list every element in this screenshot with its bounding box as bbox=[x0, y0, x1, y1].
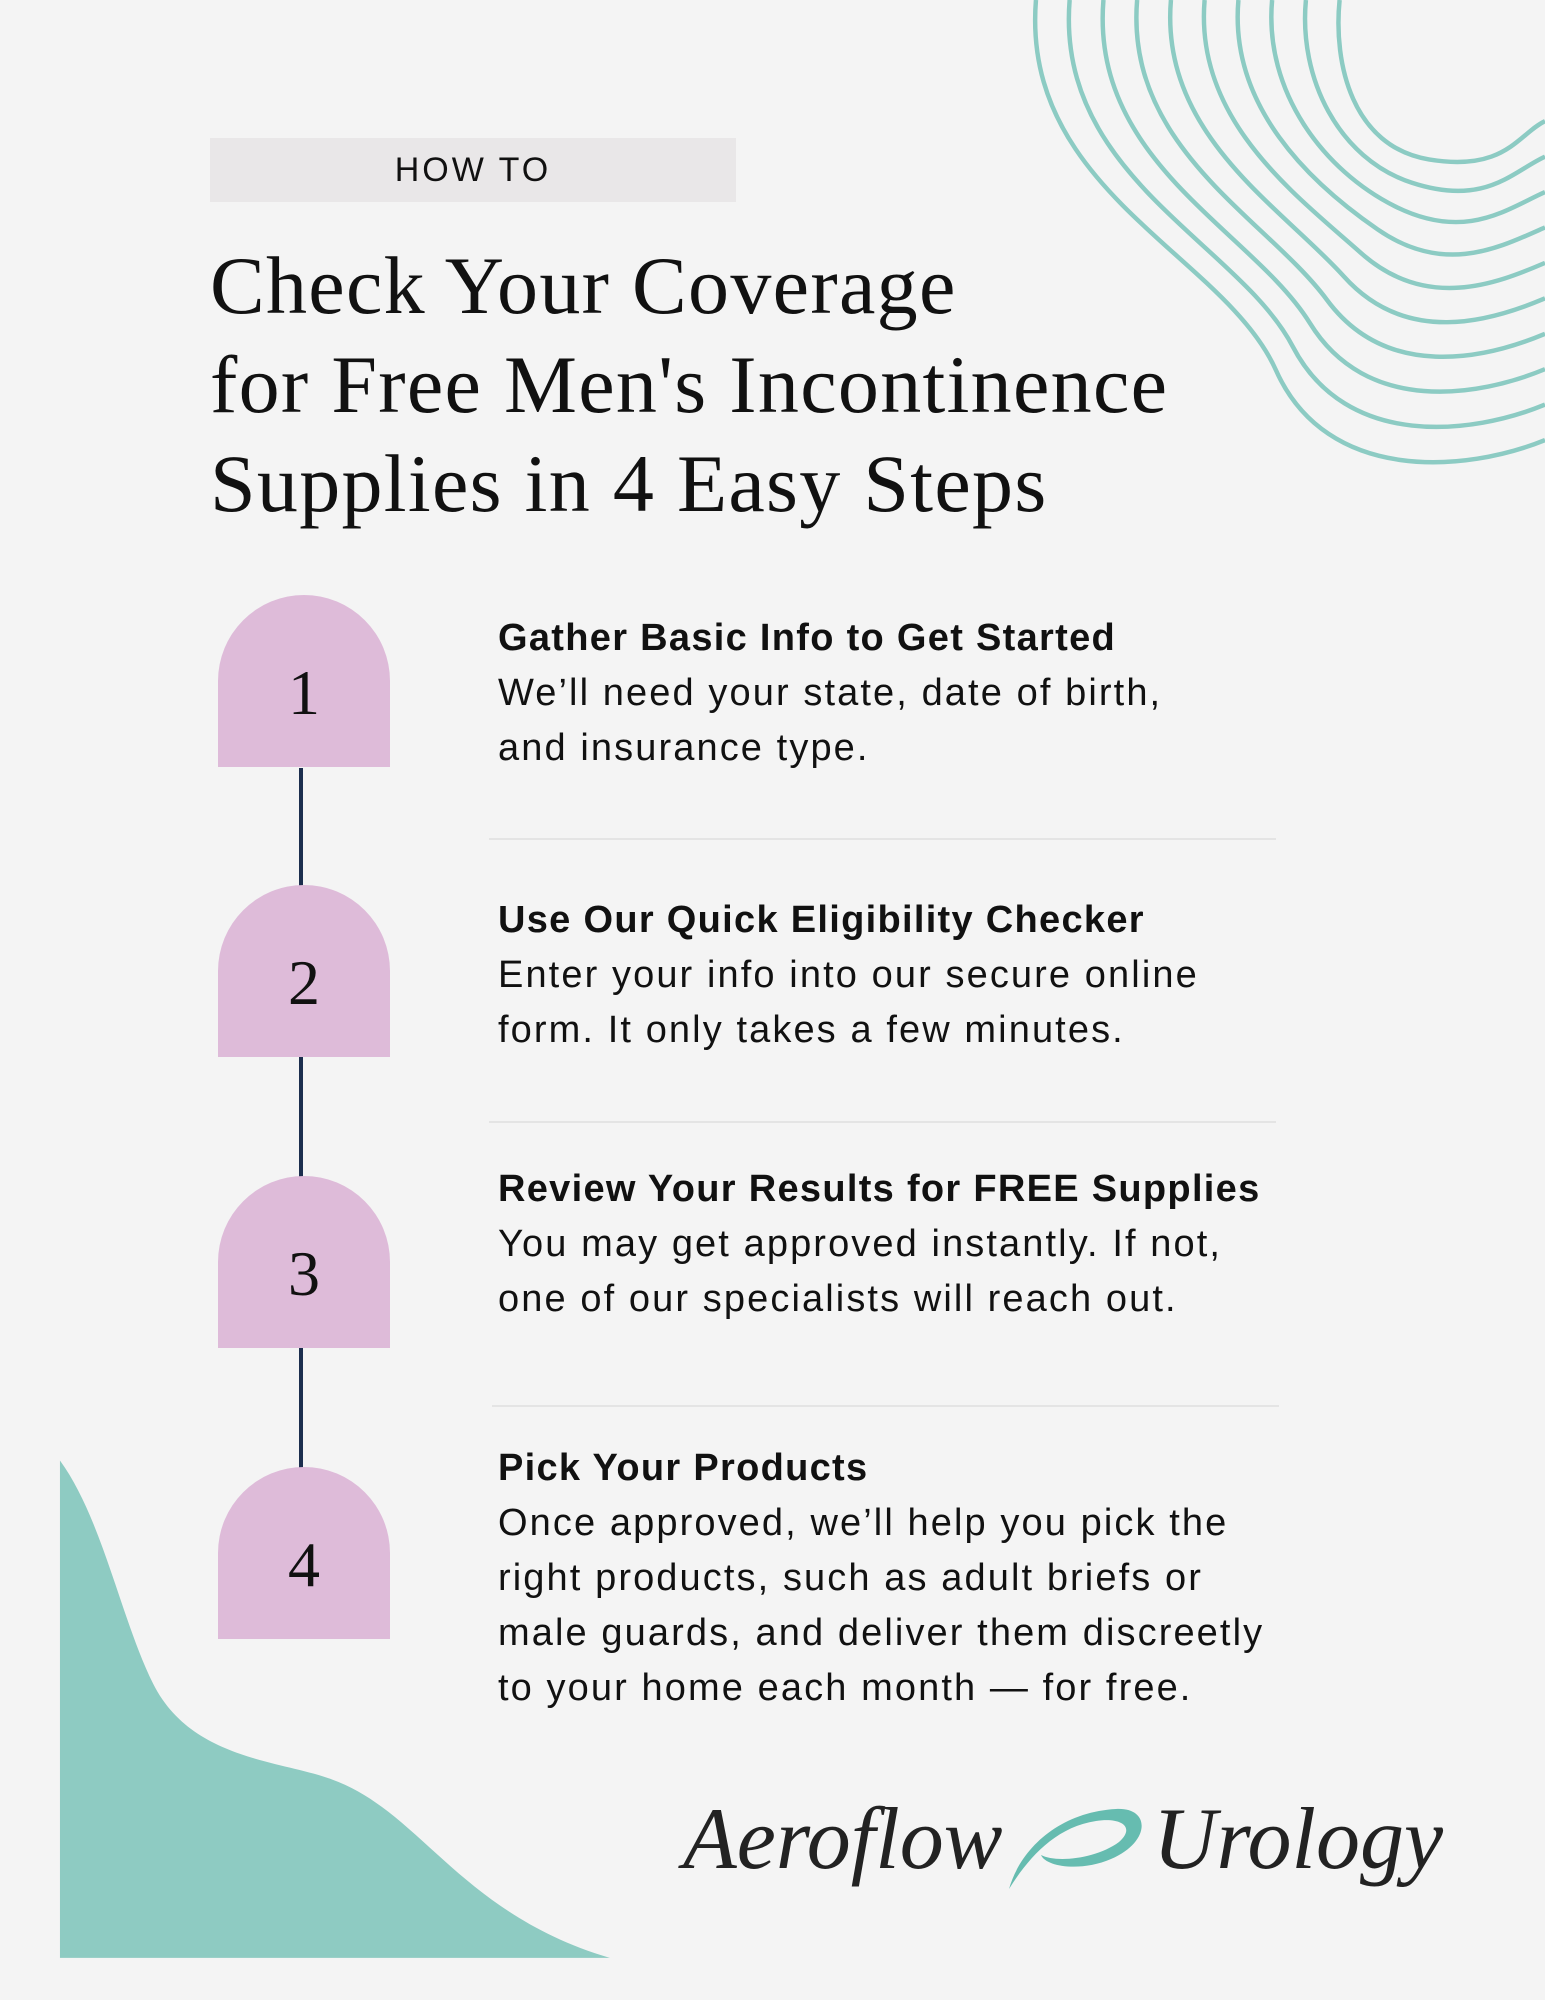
step 1 text: We’ll need your state, date of birth, bbox=[498, 672, 1162, 714]
step 2 text: Enter your info into our secure online bbox=[498, 954, 1199, 996]
title bbox=[210, 240, 1168, 529]
step 3 text: Review Your Results for FREE Supplies bbox=[498, 1168, 1261, 1210]
step 3 text: one of our specialists will reach out. bbox=[498, 1278, 1178, 1320]
label: HOW TO: HOW TO bbox=[395, 151, 551, 189]
step 4 text: Once approved, we’ll help you pick the bbox=[498, 1502, 1228, 1544]
logo: Aeroflow Urology bbox=[678, 1791, 1444, 1889]
step 1 badge: 1 bbox=[288, 657, 320, 728]
label: HOW TO bbox=[210, 138, 736, 202]
step 4 badge bbox=[218, 1467, 390, 1639]
step 4 text: Pick Your Products bbox=[498, 1447, 868, 1489]
step 3 badge: 3 bbox=[288, 1238, 320, 1309]
step 1 text bbox=[498, 617, 1162, 769]
title: Check Your Coverage bbox=[210, 240, 957, 331]
step 4 badge: 4 bbox=[288, 1529, 320, 1600]
step 2 text bbox=[498, 899, 1199, 1051]
title: for Free Men's Incontinence bbox=[210, 339, 1168, 430]
logo: Aeroflow Urology: Urology bbox=[1153, 1791, 1443, 1888]
step 2 badge bbox=[218, 885, 390, 1057]
step 3 text bbox=[498, 1168, 1261, 1320]
icon: swoosh bbox=[1009, 1808, 1142, 1889]
step 4 text: male guards, and deliver them discreetly bbox=[498, 1612, 1264, 1654]
step 1 badge bbox=[218, 595, 390, 767]
step 1 text: Gather Basic Info to Get Started bbox=[498, 617, 1116, 659]
step 1 text: and insurance type. bbox=[498, 727, 870, 769]
step 4 text bbox=[498, 1447, 1264, 1709]
step 4 text: right products, such as adult briefs or bbox=[498, 1557, 1203, 1599]
step 3 text: You may get approved instantly. If not, bbox=[498, 1223, 1222, 1265]
title: Supplies in 4 Easy Steps bbox=[210, 438, 1048, 529]
step 4 text: to your home each month — for free. bbox=[498, 1667, 1192, 1709]
step 2 badge: 2 bbox=[288, 947, 320, 1018]
step 2 text: form. It only takes a few minutes. bbox=[498, 1009, 1125, 1051]
step 2 text: Use Our Quick Eligibility Checker bbox=[498, 899, 1145, 941]
logo: Aeroflow Urology: Aeroflow bbox=[683, 1791, 1002, 1888]
timeline connector line bbox=[299, 768, 303, 1468]
step 3 badge bbox=[218, 1176, 390, 1348]
